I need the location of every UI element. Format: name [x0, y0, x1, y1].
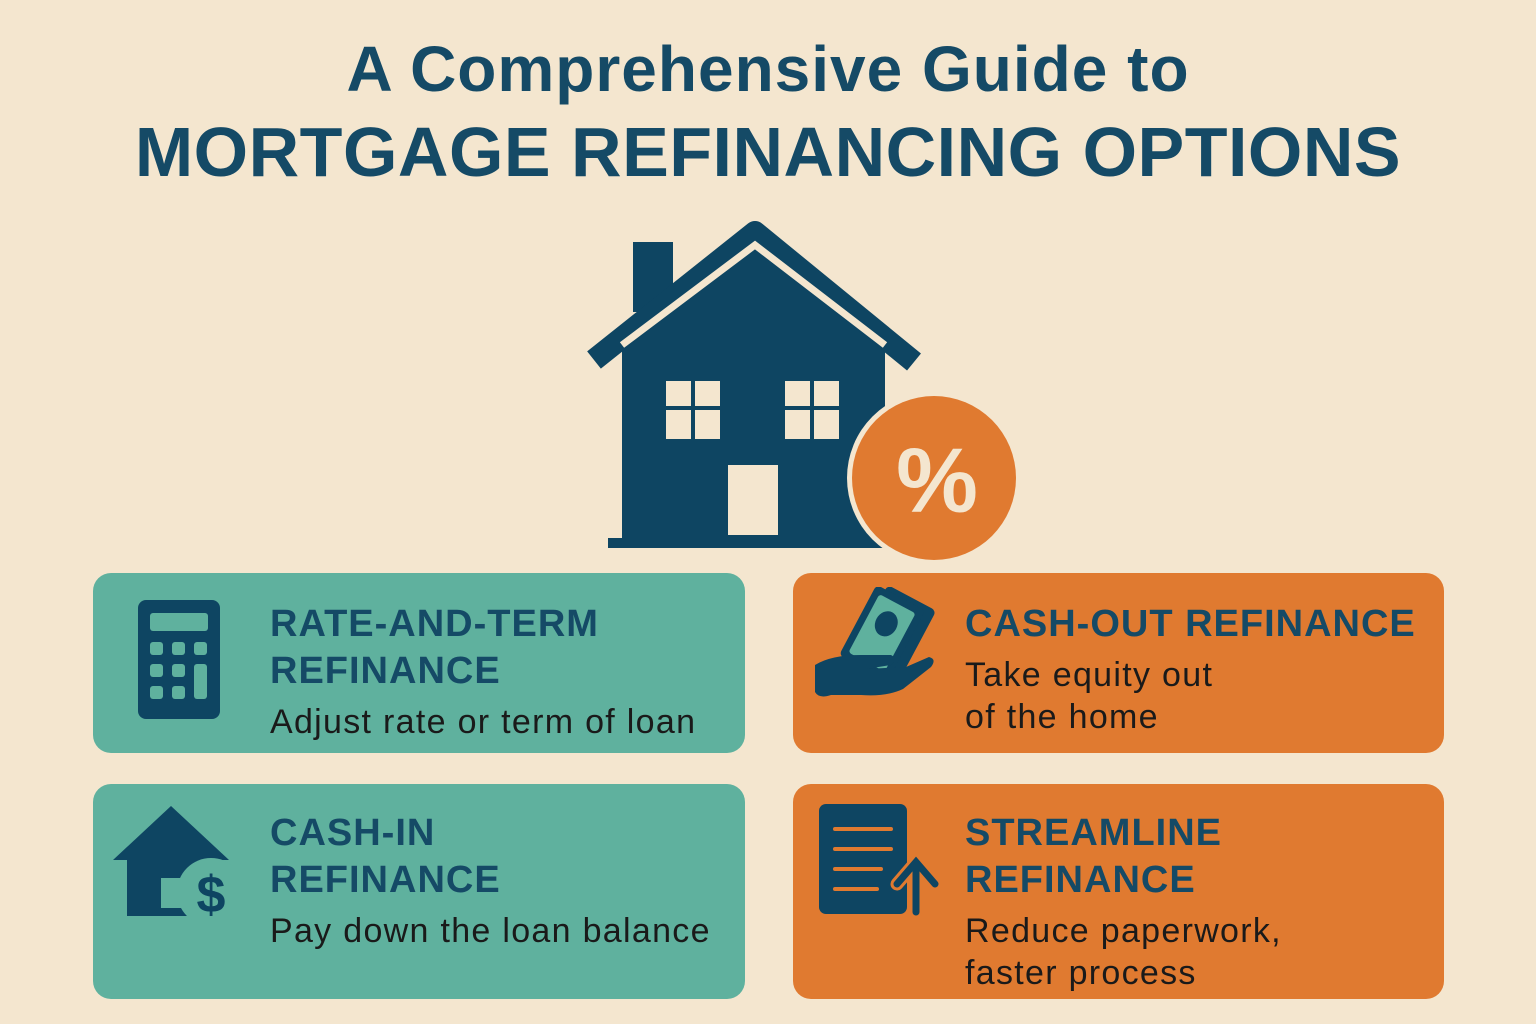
heading: CASH-IN	[270, 812, 435, 854]
icon: calculator	[138, 600, 220, 719]
panel: streamline	[793, 784, 1444, 999]
panel: rate-and-term	[93, 573, 745, 753]
icon: document with arrow	[819, 804, 938, 916]
text: of the home	[965, 698, 1159, 736]
heading	[270, 812, 501, 901]
text: Reduce paperwork,	[965, 912, 1282, 950]
title: MORTGAGE REFINANCING OPTIONS	[135, 113, 1401, 191]
panel: cash-out	[793, 573, 1444, 753]
heading: CASH-OUT REFINANCE	[965, 603, 1416, 645]
icon: hand with cash	[815, 587, 934, 696]
title: A Comprehensive Guide to	[346, 33, 1190, 105]
text	[965, 656, 1213, 736]
heading: RATE-AND-TERM	[270, 603, 599, 645]
text: faster process	[965, 954, 1197, 992]
icon: house with percent	[587, 221, 1016, 560]
text	[965, 912, 1282, 992]
heading: REFINANCE	[965, 859, 1196, 901]
heading: REFINANCE	[270, 859, 501, 901]
heading: STREAMLINE	[965, 812, 1222, 854]
heading	[965, 812, 1222, 901]
title	[135, 33, 1401, 191]
heading	[270, 603, 599, 692]
icon: house with percent: %	[896, 430, 978, 532]
text: Pay down the loan balance	[270, 912, 711, 950]
heading: REFINANCE	[270, 650, 501, 692]
text: Adjust rate or term of loan	[270, 703, 696, 741]
text: Take equity out	[965, 656, 1213, 694]
icon: house with dollar	[113, 806, 229, 921]
panel: cash-in	[93, 784, 745, 999]
